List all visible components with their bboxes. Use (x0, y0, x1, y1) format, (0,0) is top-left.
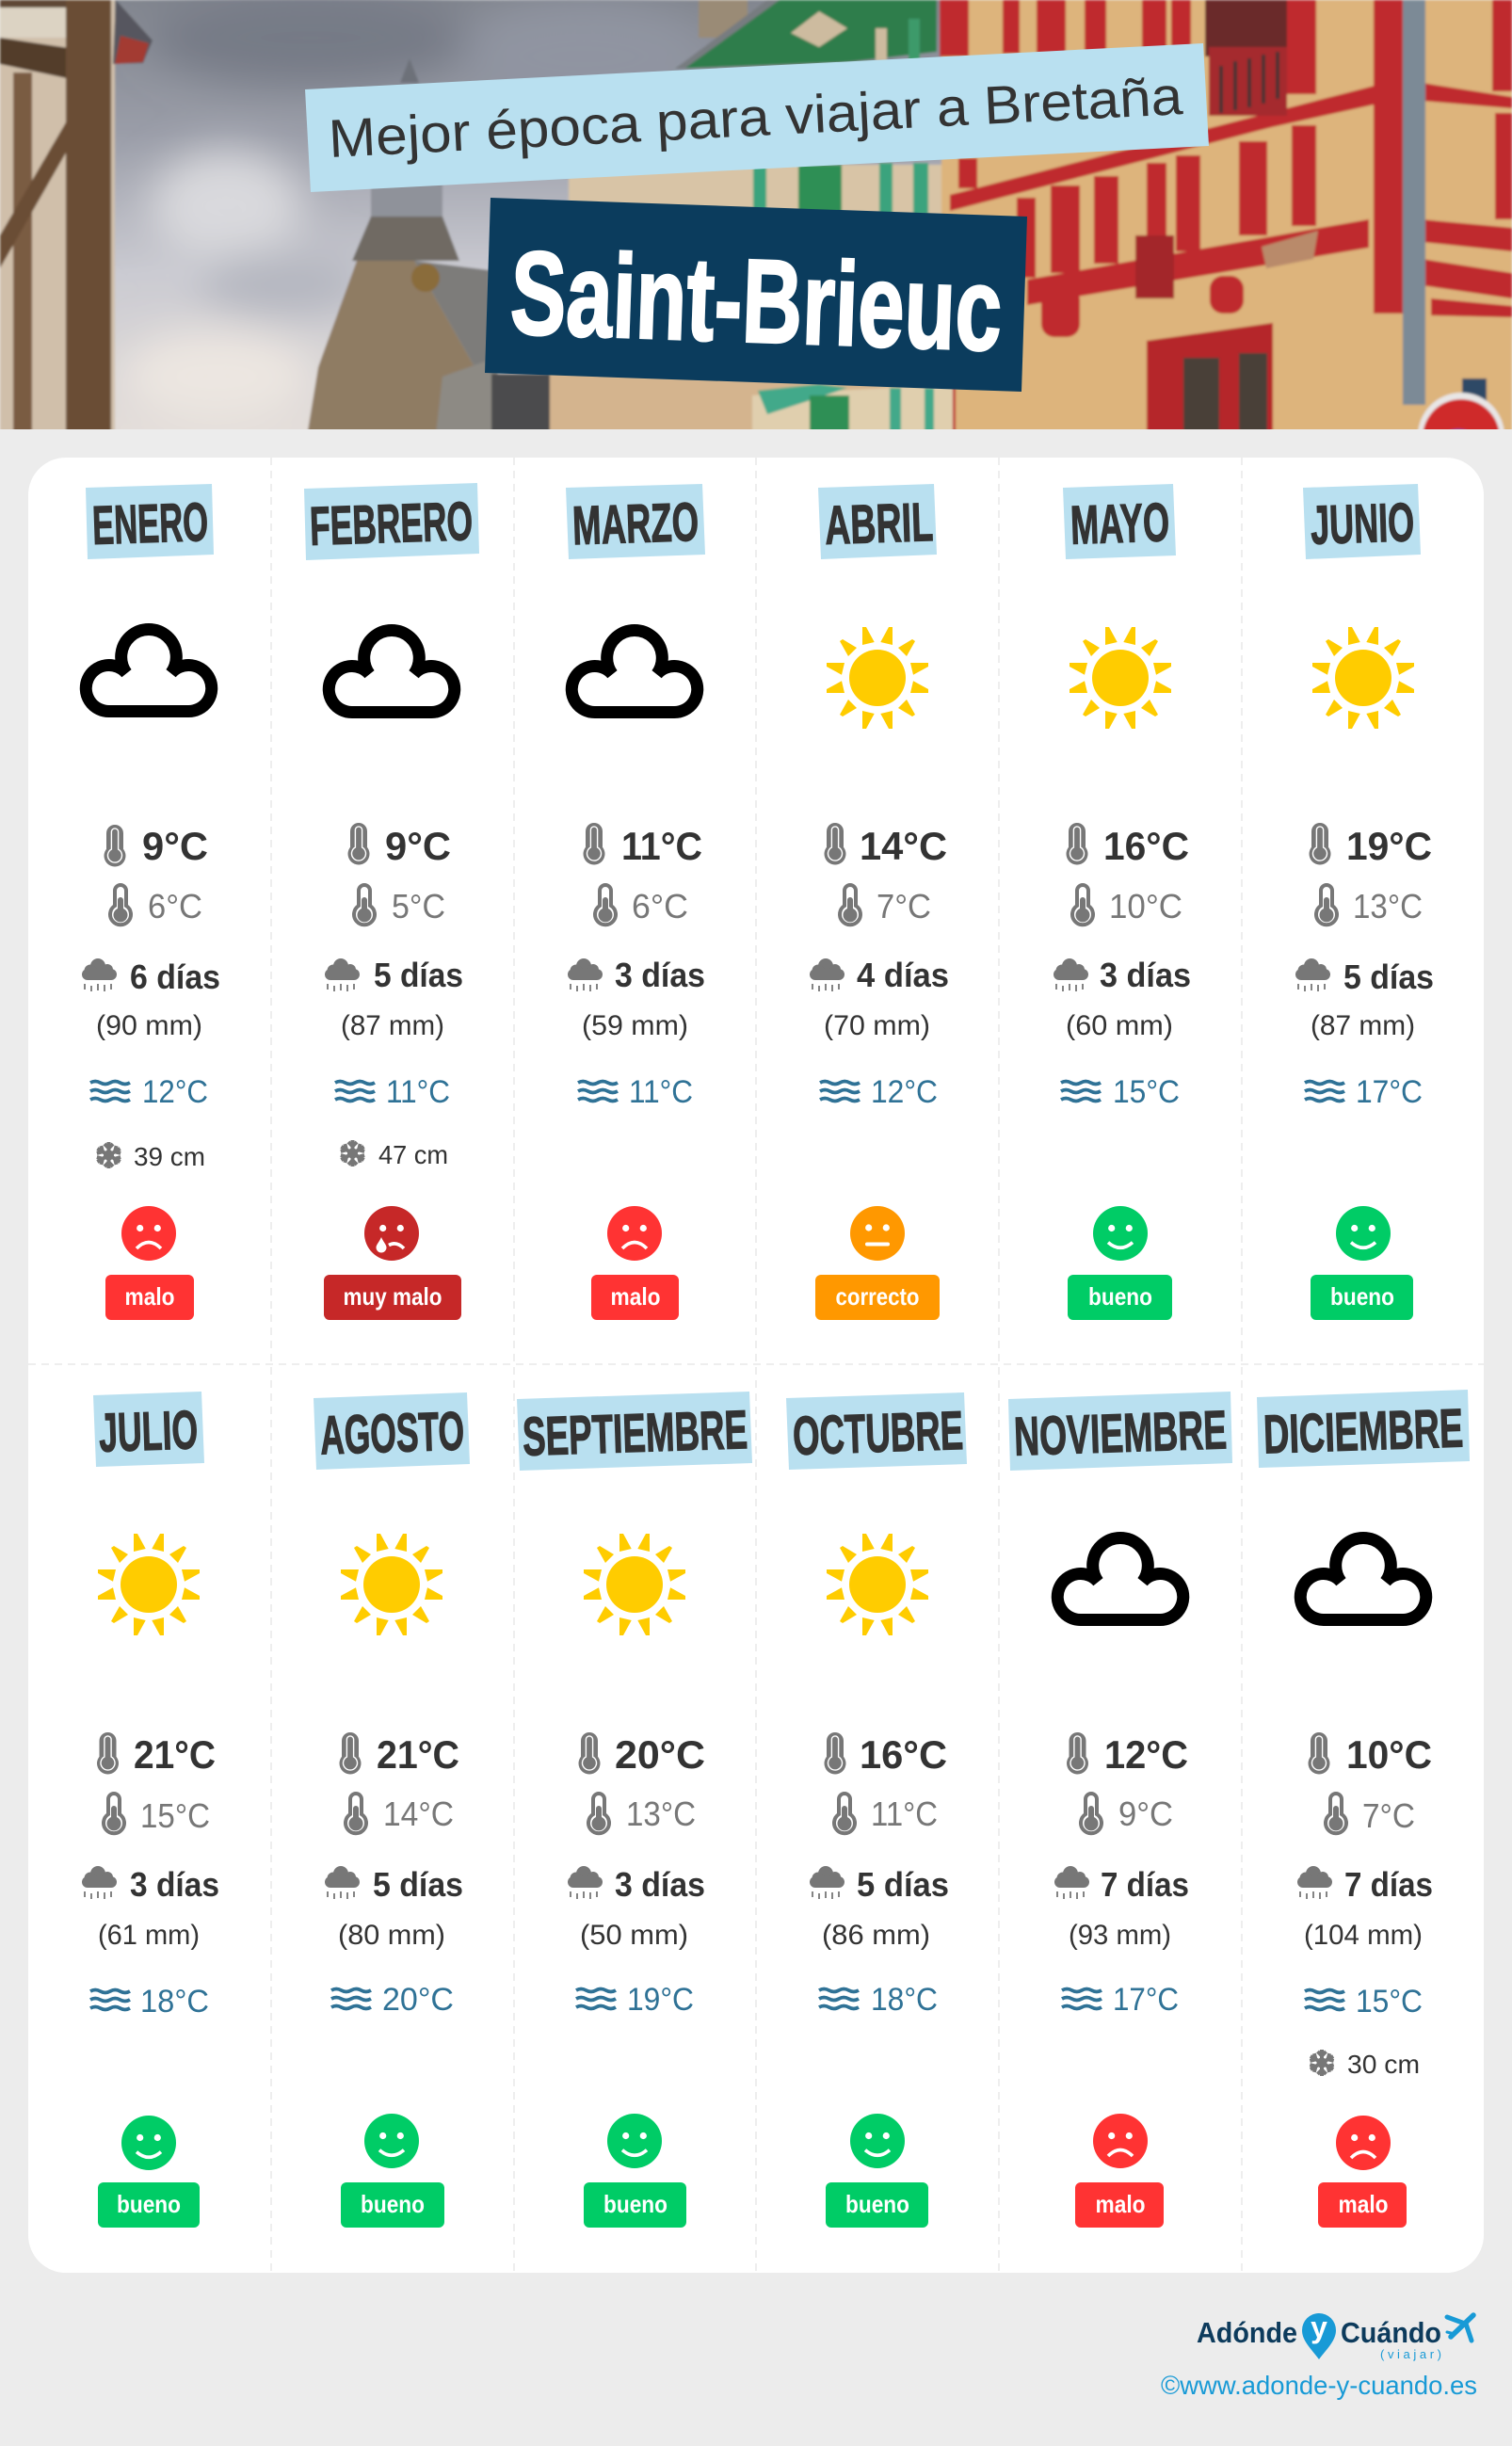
icon: cloud (329, 630, 455, 713)
rain days (568, 1865, 705, 1904)
high temperature (584, 823, 702, 868)
low temperature: 14°C (383, 1794, 454, 1833)
panel: abril (810, 484, 949, 1320)
high temperature (1309, 1732, 1432, 1777)
sea temperature (1305, 1074, 1423, 1110)
logo: Cuándo (1341, 2316, 1441, 2349)
high temperature (578, 1732, 705, 1777)
sea temperature: 11°C (386, 1074, 450, 1110)
high temperature: 9°C (385, 824, 451, 868)
rainfall: (86 mm) (822, 1920, 930, 1951)
snow (339, 1140, 448, 1169)
rain days: 7 días (1101, 1865, 1189, 1904)
panel: julio (82, 1392, 219, 2228)
rating: bueno (1330, 1282, 1394, 1311)
rating: malo (610, 1282, 661, 1311)
icon: cloud (86, 629, 212, 712)
high temperature (1067, 1732, 1188, 1777)
heading: agosto (314, 1392, 470, 1470)
rating (584, 2182, 686, 2228)
rating (324, 1275, 461, 1320)
snow (1309, 2050, 1420, 2079)
sea temperature: 17°C (1356, 1074, 1423, 1110)
high temperature (1066, 823, 1189, 868)
sea temperature (576, 1982, 694, 2018)
rainfall: (50 mm) (580, 1920, 688, 1951)
heading: febrero (304, 483, 479, 560)
snow: 30 cm (1347, 2050, 1420, 2079)
icon: sad face (1093, 2114, 1148, 2168)
main card (28, 458, 1484, 2273)
rating: bueno (1088, 1282, 1152, 1311)
rainfall: (93 mm) (1069, 1920, 1171, 1951)
low temperature: 7°C (1362, 1796, 1415, 1835)
low temperature: 9°C (1118, 1794, 1173, 1833)
low temperature (595, 885, 688, 925)
panel: mayo (1054, 484, 1191, 1320)
icon: sun (341, 1534, 442, 1635)
low temperature (354, 885, 445, 925)
low temperature: 15°C (140, 1796, 210, 1835)
heading: marzo: MARZO (571, 491, 700, 556)
high temperature: 10°C (1346, 1732, 1432, 1777)
low temperature: 7°C (877, 887, 931, 925)
low temperature (110, 885, 202, 925)
panel: enero (82, 484, 220, 1320)
icon: sun (1312, 627, 1414, 729)
sea temperature: 15°C (1356, 1984, 1423, 2020)
rain days: 5 días (857, 1865, 949, 1904)
rain days (1295, 957, 1434, 996)
heading: julio (93, 1392, 204, 1467)
sea temperature: 20°C (382, 1982, 454, 2018)
icon: happy face (1093, 1206, 1148, 1261)
snow: 39 cm (134, 1142, 205, 1171)
rating (1068, 1275, 1172, 1320)
rating: malo (124, 1282, 175, 1311)
low temperature: 10°C (1109, 887, 1182, 925)
heading: noviembre (1008, 1392, 1232, 1471)
sea temperature (578, 1074, 693, 1110)
rating: muy malo (343, 1282, 442, 1311)
heading: junio (1303, 484, 1421, 559)
rain days: 6 días (130, 957, 220, 996)
icon: sad face (607, 1206, 662, 1261)
sea temperature (1305, 1984, 1423, 2020)
icon: neutral face (850, 1206, 905, 1261)
header photo: timbered street (0, 0, 1512, 429)
high temperature (348, 823, 451, 868)
high temperature: 9°C (142, 824, 208, 868)
icon: crying face (364, 1206, 419, 1261)
logo: Adónde (1197, 2316, 1297, 2349)
rain days: 7 días (1344, 1865, 1433, 1904)
panel: septiembre (517, 1392, 752, 2228)
high temperature: 21°C (377, 1732, 459, 1777)
low temperature (834, 1794, 938, 1833)
high temperature: 19°C (1346, 824, 1432, 868)
rain days (82, 1865, 219, 1904)
rain days: 3 días (615, 1865, 705, 1904)
sea temperature (90, 1074, 208, 1110)
low temperature: 11°C (871, 1794, 938, 1833)
icon: sun (827, 1534, 928, 1635)
sea temperature: 17°C (1113, 1982, 1179, 2018)
high temperature (1309, 823, 1432, 868)
high temperature: 16°C (1103, 824, 1189, 868)
panel: octubre (786, 1392, 967, 2228)
low temperature: 13°C (1353, 887, 1423, 925)
title banner: Saint-Brieuc (508, 226, 1005, 376)
heading: octubre: OCTUBRE (792, 1400, 964, 1467)
heading: noviembre: NOVIEMBRE (1013, 1399, 1228, 1468)
snow (95, 1142, 205, 1171)
heading: abril: ABRIL (824, 491, 934, 556)
rainfall: (104 mm) (1304, 1920, 1423, 1951)
heading: mayo: MAYO (1070, 491, 1170, 556)
icon: cloud (571, 630, 698, 713)
low temperature: 13°C (626, 1794, 696, 1833)
sea temperature (1061, 1074, 1180, 1110)
website credit: ©www.adonde-y-cuando.es (1161, 2371, 1477, 2400)
heading: febrero: FEBRERO (309, 491, 474, 557)
icon: plane (1447, 2315, 1473, 2341)
rating: bueno (361, 2190, 425, 2218)
heading: septiembre (517, 1392, 752, 1471)
rain days: 3 días (615, 956, 705, 994)
sea temperature (820, 1074, 938, 1110)
high temperature: 20°C (615, 1732, 705, 1777)
rating: malo (1339, 2190, 1388, 2218)
heading: enero (86, 484, 214, 559)
icon: sun (1070, 627, 1171, 729)
sea temperature: 18°C (140, 1984, 209, 2020)
high temperature (825, 823, 947, 868)
subtitle banner (305, 43, 1209, 192)
rating (591, 1275, 679, 1320)
rain days (82, 957, 220, 996)
sea temperature: 12°C (871, 1074, 938, 1110)
rating: bueno (845, 2190, 909, 2218)
panel: marzo (566, 484, 705, 1320)
panel: diciembre (1257, 1390, 1470, 2228)
sea temperature (335, 1074, 450, 1110)
rating (1311, 1275, 1413, 1320)
rainfall: (80 mm) (338, 1920, 445, 1951)
low temperature (1316, 885, 1423, 925)
panel: febrero (304, 483, 479, 1320)
low temperature (840, 885, 931, 925)
icon: happy face (850, 2114, 905, 2168)
icon: happy face (121, 2116, 176, 2170)
icon: sun (584, 1534, 685, 1635)
icon: cloud (1057, 1537, 1183, 1620)
high temperature: 16°C (860, 1732, 947, 1777)
rainfall: (87 mm) (341, 1010, 444, 1041)
icon: map pin (1302, 2313, 1336, 2359)
rainfall: (70 mm) (824, 1010, 930, 1041)
low temperature: 5°C (392, 887, 445, 925)
low temperature: 6°C (632, 887, 688, 925)
sea temperature: 19°C (627, 1982, 694, 2018)
snow: 47 cm (378, 1140, 448, 1169)
rain days: 3 días (130, 1865, 219, 1904)
panel: agosto (314, 1392, 470, 2228)
rating: correcto (836, 1282, 919, 1311)
sea temperature (819, 1982, 938, 2018)
rainfall: (60 mm) (1066, 1010, 1173, 1041)
low temperature: 6°C (148, 887, 202, 925)
rating: malo (1096, 2190, 1145, 2218)
low temperature (588, 1794, 696, 1833)
rating (826, 2182, 928, 2228)
panel: noviembre (1008, 1392, 1232, 2228)
sea temperature: 12°C (142, 1074, 208, 1110)
rainfall: (61 mm) (98, 1920, 200, 1951)
heading: enero: ENERO (91, 491, 209, 556)
sea temperature (331, 1982, 454, 2018)
sea temperature: 15°C (1113, 1074, 1180, 1110)
rainfall: (59 mm) (582, 1010, 688, 1041)
rating (105, 1275, 194, 1320)
high temperature (104, 824, 208, 868)
rainfall: (90 mm) (96, 1010, 202, 1041)
sea temperature: 18°C (871, 1982, 938, 2018)
rain days (810, 1865, 949, 1904)
rating (1075, 2182, 1164, 2228)
rating: bueno (603, 2190, 668, 2218)
high temperature (339, 1732, 459, 1777)
icon: happy face (364, 2114, 419, 2168)
subtitle banner: Mejor época para viajar a Bretaña (327, 66, 1184, 169)
rain days (1054, 1865, 1189, 1904)
rainfall: (87 mm) (1311, 1010, 1415, 1041)
low temperature (1072, 885, 1182, 925)
high temperature (97, 1732, 216, 1777)
heading: mayo (1063, 484, 1176, 559)
rating (815, 1275, 940, 1320)
rain days: 5 días (373, 1865, 463, 1904)
rain days: 4 días (857, 956, 949, 994)
rain days (325, 1865, 463, 1904)
heading: abril (818, 484, 937, 559)
rain days (325, 956, 463, 994)
logo: y (1311, 2310, 1327, 2344)
high temperature: 14°C (860, 824, 947, 868)
heading: marzo (566, 484, 705, 559)
rain days (1297, 1865, 1433, 1904)
rain days: 3 días (1100, 956, 1191, 994)
rain days (568, 956, 705, 994)
rating: bueno (117, 2190, 181, 2218)
icon: happy face (607, 2114, 662, 2168)
low temperature (1081, 1794, 1173, 1833)
logo: (viajar) (1380, 2347, 1441, 2361)
title banner (485, 198, 1027, 392)
high temperature: 21°C (134, 1732, 216, 1777)
rain days (1054, 956, 1191, 994)
icon: cloud (1300, 1537, 1426, 1620)
rating (98, 2182, 200, 2228)
sea temperature (1062, 1982, 1179, 2018)
low temperature (104, 1794, 210, 1835)
icon: sad face (121, 1206, 176, 1261)
rating (1318, 2182, 1407, 2228)
heading: septiembre: SEPTIEMBRE (522, 1399, 748, 1468)
heading: octubre (786, 1392, 967, 1470)
panel: junio (1295, 484, 1434, 1320)
rain days: 5 días (1343, 957, 1434, 996)
high temperature: 11°C (621, 824, 702, 868)
icon: sun (98, 1534, 200, 1635)
low temperature (1326, 1794, 1415, 1835)
rain days: 5 días (374, 956, 463, 994)
low temperature (346, 1794, 454, 1833)
high temperature: 12°C (1104, 1732, 1188, 1777)
heading: julio: JULIO (98, 1399, 199, 1464)
icon: happy face (1336, 1206, 1391, 1261)
logo (1197, 2310, 1473, 2361)
rain days (810, 956, 949, 994)
sea temperature: 11°C (629, 1074, 693, 1110)
icon: sun (827, 627, 928, 729)
icon: sad face (1336, 2116, 1391, 2170)
rating (341, 2182, 444, 2228)
sea temperature (90, 1984, 209, 2020)
heading: junio: JUNIO (1310, 491, 1415, 556)
heading: agosto: AGOSTO (319, 1400, 465, 1467)
